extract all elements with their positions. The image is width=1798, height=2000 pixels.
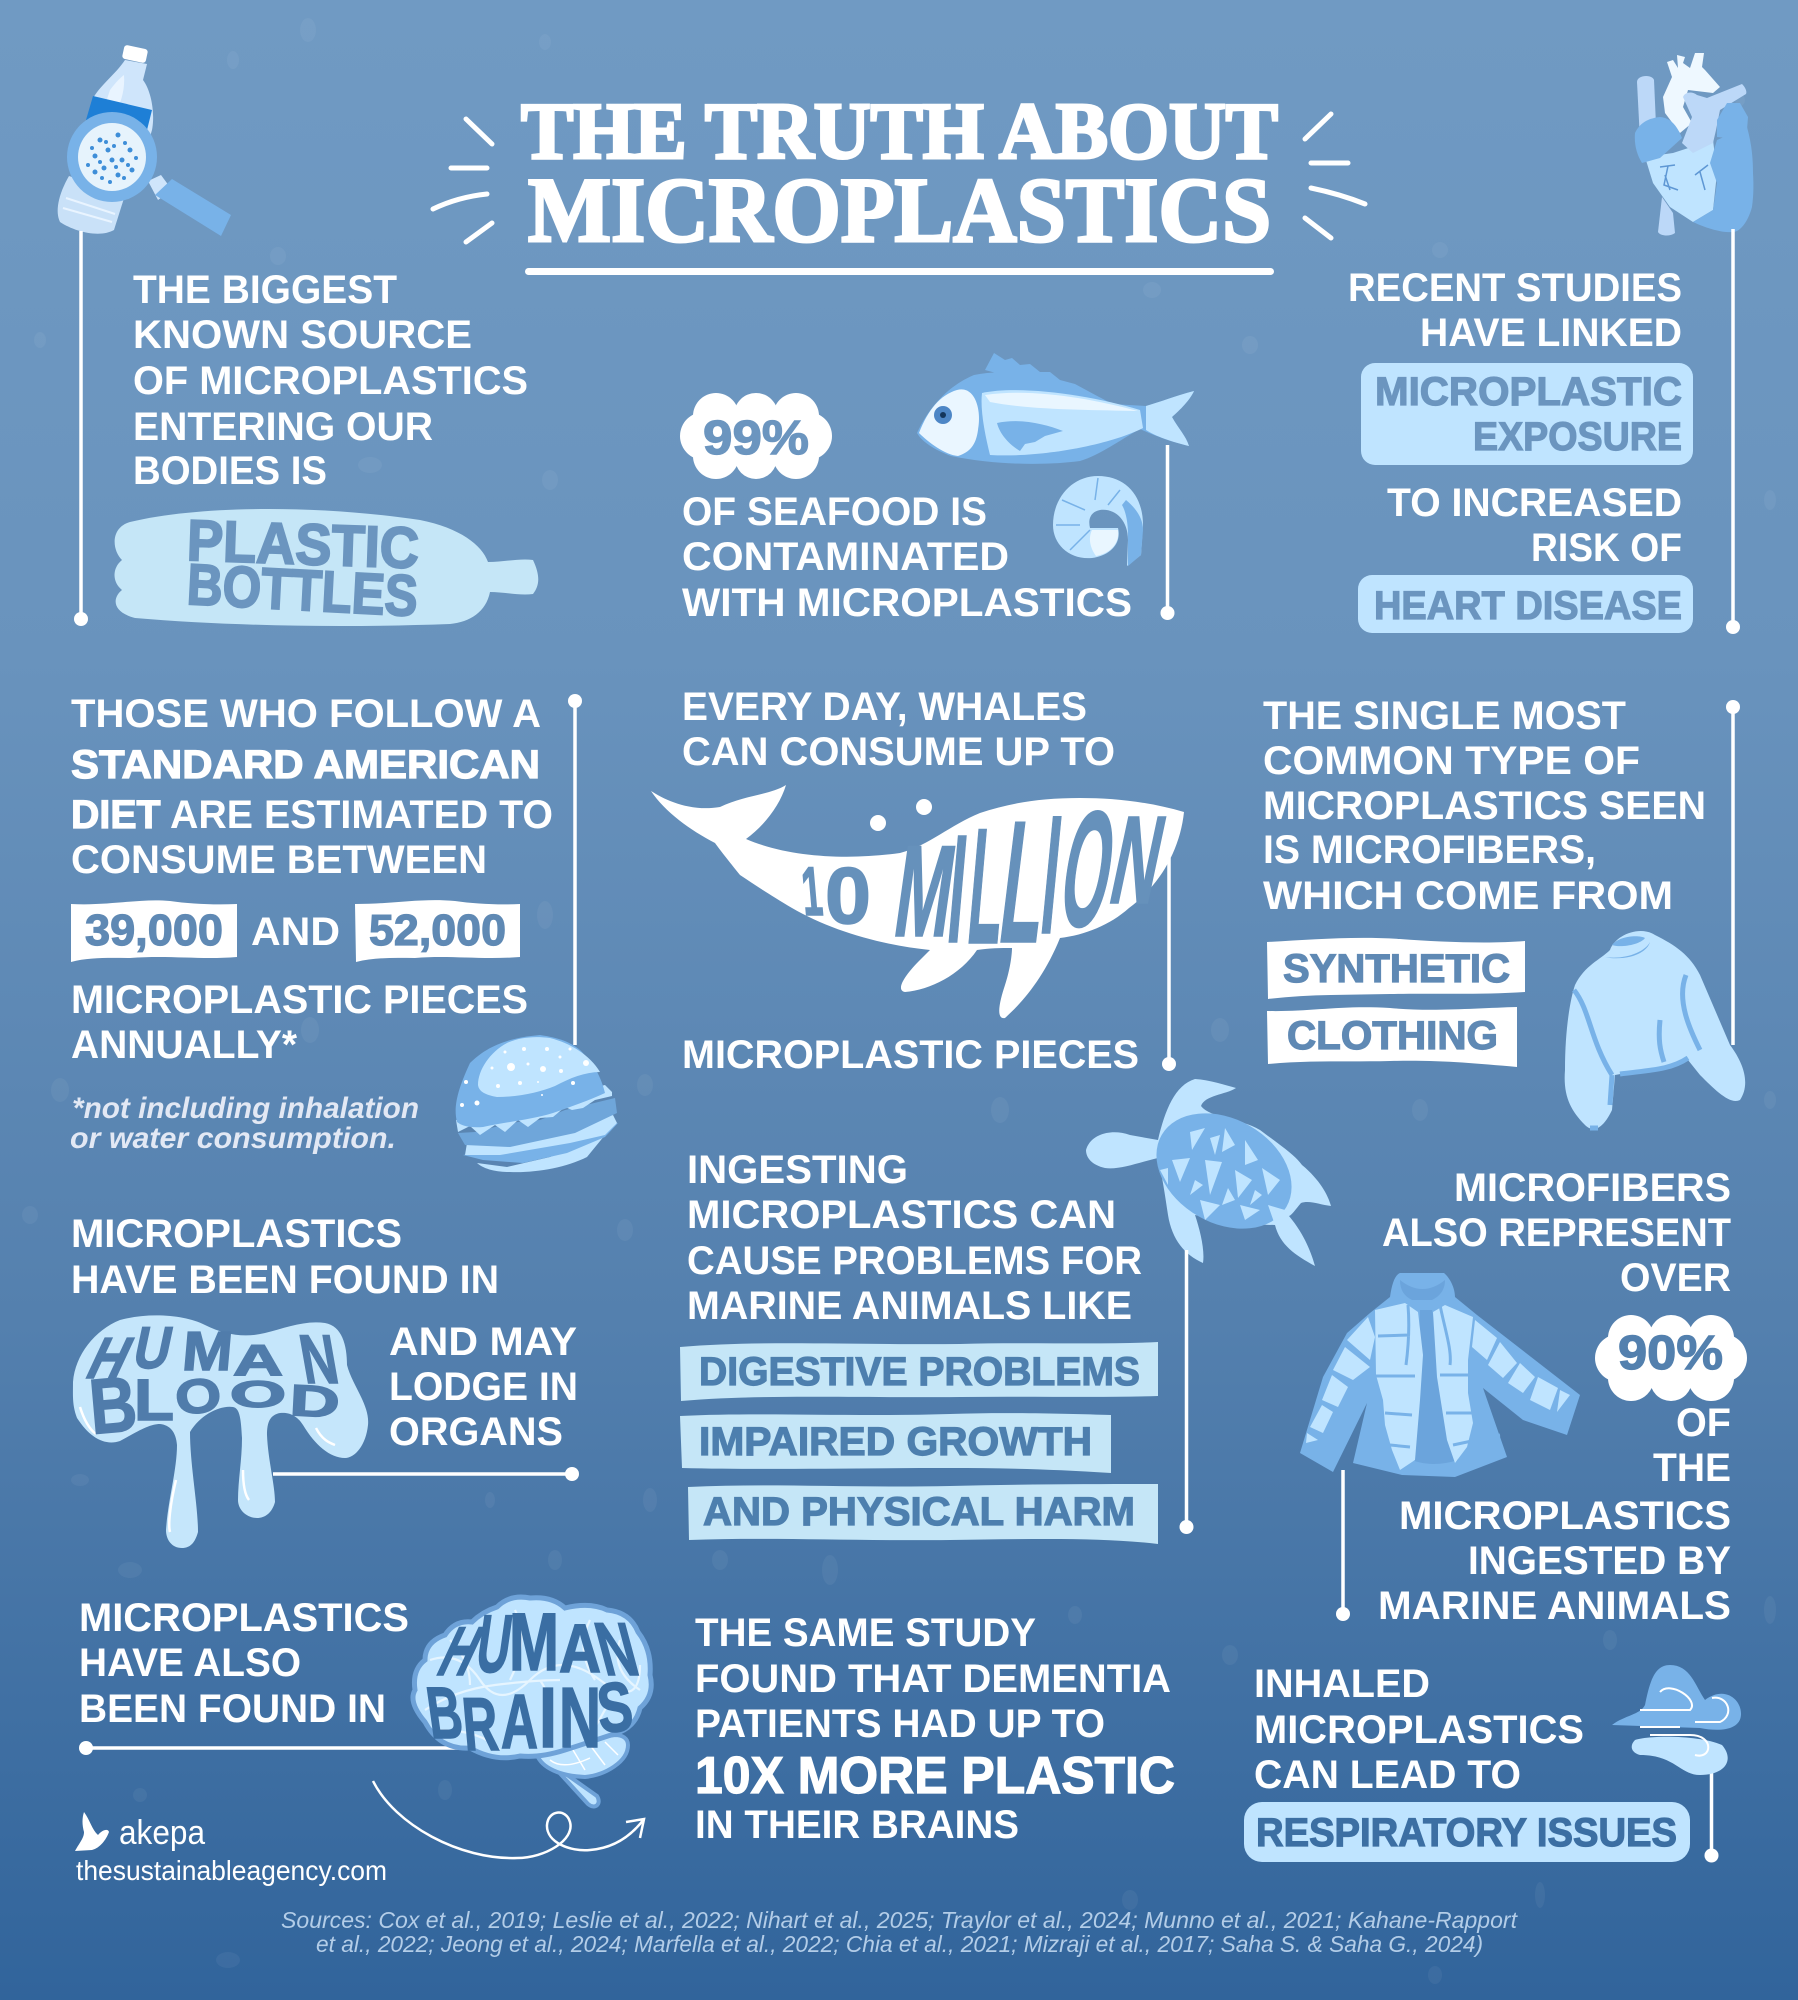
text: of the microplastics ingested: MICROPLASTICS xyxy=(1399,1494,1731,1538)
illustration: brain: N xyxy=(587,1608,646,1692)
logo: akepa: thesustainableagency.com xyxy=(76,1855,387,1886)
title text xyxy=(521,88,1278,261)
text: microfibers xyxy=(1263,694,1706,918)
illustration: whale with 10 million: O xyxy=(1050,778,1126,962)
text: biggest source: THE BIGGEST xyxy=(133,268,397,312)
label: heart disease: HEART DISEASE xyxy=(1374,584,1682,628)
text: also found in: MICROPLASTICS xyxy=(79,1596,409,1640)
title text: MICROPLASTICS xyxy=(528,159,1271,261)
text: ingesting problems: MICROPLASTICS CAN xyxy=(687,1193,1116,1237)
footnote: *not including inhalation xyxy=(72,1092,419,1125)
title underline xyxy=(525,268,1274,275)
text: also found in: HAVE ALSO xyxy=(79,1641,301,1685)
text: pieces annually: ANNUALLY* xyxy=(71,1023,297,1067)
text: recent studies: HAVE LINKED xyxy=(1420,311,1682,355)
label: synthetic clothing: CLOTHING xyxy=(1287,1014,1498,1058)
label: respiratory issues: RESPIRATORY ISSUES xyxy=(1256,1811,1677,1855)
text: and may lodge: AND MAY xyxy=(389,1320,577,1364)
logo: akepa xyxy=(75,1812,387,1886)
label: microplastic exposure xyxy=(1361,363,1693,465)
illustration: brain: I xyxy=(539,1671,557,1766)
text: found in: HAVE BEEN FOUND IN xyxy=(71,1258,499,1302)
icon: burger xyxy=(456,1035,618,1172)
illustration: brain: B xyxy=(422,1672,467,1754)
text: and may lodge: LODGE IN xyxy=(389,1365,578,1409)
text: biggest source xyxy=(133,268,528,493)
text: found in: MICROPLASTICS xyxy=(71,1212,402,1256)
text: increased risk xyxy=(1387,481,1682,570)
illustration: whale with 10 million: I xyxy=(1035,780,1069,969)
text: found in xyxy=(71,1212,499,1302)
label: 39,000 and 52,000: 39,000 xyxy=(85,906,223,955)
illustration: brain: A xyxy=(501,1679,538,1765)
text: diet estimate: DIET ARE ESTIMATED TO xyxy=(71,793,553,837)
icon: shrimp xyxy=(1053,476,1143,566)
label: impaired growth: IMPAIRED GROWTH xyxy=(699,1420,1092,1464)
text: microfibers represent: MICROFIBERS xyxy=(1454,1166,1731,1210)
text: seafood contaminated: WITH MICROPLASTICS xyxy=(682,581,1132,625)
label: 39,000 and 52,000: 52,000 xyxy=(369,906,506,955)
text: microfibers represent: ALSO REPRESENT xyxy=(1382,1211,1731,1255)
logo: akepa: akepa xyxy=(119,1814,205,1852)
text: seafood contaminated xyxy=(682,490,1132,625)
illustration: blood drip: U xyxy=(128,1315,178,1381)
illustration: brain: S xyxy=(593,1667,636,1748)
text: microfibers: MICROPLASTICS SEEN xyxy=(1263,784,1706,828)
label: and physical harm xyxy=(688,1484,1158,1544)
panel: marine animals xyxy=(680,1079,1331,1544)
panel: dementia study: 10X MORE PLASTIC xyxy=(695,1747,1175,1805)
illustration: blood drip: O xyxy=(173,1368,224,1426)
icon: wind xyxy=(1612,1665,1741,1775)
panel: plastic bottles xyxy=(58,45,538,629)
illustration: whale with 10 million xyxy=(651,778,1184,1018)
text: pieces annually: MICROPLASTIC PIECES xyxy=(71,978,528,1022)
illustration: whale with 10 million: 0 xyxy=(825,851,871,940)
text: diet estimate: CONSUME BETWEEN xyxy=(71,838,487,882)
text: of the microplastics ingested: INGESTED BY xyxy=(1468,1539,1731,1583)
panel: respiratory issues xyxy=(1244,1662,1741,1862)
illustration: whale with 10 million: M xyxy=(887,819,964,964)
text: biggest source: ENTERING OUR xyxy=(133,405,433,449)
text: recent studies xyxy=(1348,266,1682,355)
text: diet estimate: STANDARD AMERICAN xyxy=(71,743,540,787)
text: microfibers represent xyxy=(1382,1166,1731,1300)
illustration: blood drip: B xyxy=(86,1359,140,1451)
title xyxy=(433,88,1365,275)
illustration: whale with 10 million: L xyxy=(991,786,1057,980)
text: increased risk: TO INCREASED xyxy=(1387,481,1682,525)
bottle-shaped label: plastic bottles xyxy=(114,508,538,629)
text: microfibers: IS MICROFIBERS, xyxy=(1263,828,1596,872)
text: microfibers: COMMON TYPE OF xyxy=(1263,739,1640,783)
panel: seafood xyxy=(680,353,1194,625)
panel: human blood xyxy=(71,1212,579,1548)
label: and physical harm: AND PHYSICAL HARM xyxy=(703,1490,1135,1534)
sources xyxy=(281,1907,1519,1957)
text: and may lodge: ORGANS xyxy=(389,1410,563,1454)
label: 39,000 and 52,000: AND xyxy=(251,910,340,954)
text: also found in: BEEN FOUND IN xyxy=(79,1687,386,1731)
panel: dementia study: PATIENTS HAD UP TO xyxy=(695,1702,1105,1746)
callout: 99% cloud: 99% xyxy=(703,412,809,465)
text: recent studies: RECENT STUDIES xyxy=(1348,266,1682,310)
label: microplastic exposure: MICROPLASTIC xyxy=(1375,370,1682,414)
text: microfibers represent: OVER xyxy=(1620,1256,1731,1300)
bottle-shaped label: plastic bottles: BOTTLES xyxy=(185,552,420,629)
text: inhaled: CAN LEAD TO xyxy=(1254,1753,1521,1797)
label: synthetic clothing xyxy=(1267,938,1525,1067)
callout: 90% cloud xyxy=(1595,1315,1747,1401)
text: inhaled: INHALED xyxy=(1254,1662,1430,1706)
illustration: blood drip: O xyxy=(230,1374,286,1415)
text: microplastic pieces: MICROPLASTIC PIECES xyxy=(682,1033,1139,1077)
panel: microfibers xyxy=(1263,694,1747,1628)
text: ingesting problems: MARINE ANIMALS LIKE xyxy=(687,1284,1132,1328)
illustration: whale with 10 million: N xyxy=(1100,790,1176,930)
panel: dementia study: THE SAME STUDY xyxy=(695,1611,1036,1655)
text: of the microplastics ingested xyxy=(1378,1401,1731,1628)
text: ingesting problems: INGESTING xyxy=(687,1148,908,1192)
illustration: blood drip: D xyxy=(288,1376,341,1428)
text: seafood contaminated: OF SEAFOOD IS xyxy=(682,490,987,534)
arrow: squiggle to dementia text xyxy=(373,1781,644,1858)
panel: dementia study: FOUND THAT DEMENTIA xyxy=(695,1657,1171,1701)
footnote xyxy=(70,1092,419,1155)
text: inhaled xyxy=(1254,1662,1584,1797)
icon: heart xyxy=(1635,53,1753,236)
text: diet estimate xyxy=(71,692,553,882)
label: digestive problems: DIGESTIVE PROBLEMS xyxy=(699,1350,1140,1394)
text: whales intro: EVERY DAY, WHALES xyxy=(682,685,1087,729)
label: 39,000 and 52,000 xyxy=(71,900,520,962)
illustration: whale with 10 million: L xyxy=(962,794,1012,979)
icon: puffer jacket xyxy=(1300,1273,1580,1477)
text: and may lodge xyxy=(389,1320,578,1454)
text: biggest source: BODIES IS xyxy=(133,449,327,493)
illustration: blood drip: N xyxy=(294,1320,344,1398)
text: of the microplastics ingested: OF xyxy=(1676,1401,1731,1445)
illustration: whale with 10 million: 1 xyxy=(798,852,825,930)
text: biggest source: KNOWN SOURCE xyxy=(133,313,472,357)
text: microfibers: WHICH COME FROM xyxy=(1263,874,1673,918)
illustration: brain: M xyxy=(509,1597,559,1688)
text: pieces annually xyxy=(71,978,528,1067)
panel: whales xyxy=(651,685,1184,1077)
text: ingesting problems: CAUSE PROBLEMS FOR xyxy=(687,1239,1142,1283)
text: microfibers: THE SINGLE MOST xyxy=(1263,694,1626,738)
icon: bottle under magnifying glass xyxy=(58,45,231,236)
illustration: blood drip: M xyxy=(180,1320,235,1382)
label: microplastic exposure: EXPOSURE xyxy=(1473,415,1682,459)
illustration: blood drip: A xyxy=(233,1336,283,1385)
text: also found in xyxy=(79,1596,409,1731)
illustration: blood drip: L xyxy=(134,1368,174,1433)
label: impaired growth xyxy=(680,1413,1111,1473)
text: ingesting problems xyxy=(687,1148,1142,1328)
callout: 90% cloud: 90% xyxy=(1618,1327,1723,1380)
title sunburst rays xyxy=(433,114,1365,242)
text: inhaled: MICROPLASTICS xyxy=(1254,1708,1584,1752)
callout: 99% cloud xyxy=(680,393,832,479)
panel: dementia study xyxy=(695,1611,1175,1847)
text: of the microplastics ingested: MARINE ANIMALS xyxy=(1378,1584,1731,1628)
text: increased risk: RISK OF xyxy=(1531,526,1682,570)
icon: sweater xyxy=(1565,931,1745,1129)
icon: turtle with plastic xyxy=(1086,1079,1331,1266)
illustration: brain xyxy=(413,1597,651,1806)
text: whales intro xyxy=(682,685,1115,774)
label: synthetic clothing: SYNTHETIC xyxy=(1283,947,1510,991)
illustration: brain: N xyxy=(559,1671,601,1766)
panel: human brains xyxy=(79,1596,651,1858)
illustration: brain: R xyxy=(459,1682,501,1766)
bottle-shaped label: plastic bottles: PLASTIC xyxy=(186,508,420,581)
text: whales intro: CAN CONSUME UP TO xyxy=(682,730,1115,774)
icon: fish xyxy=(917,353,1194,464)
sources: Sources: Cox et al., 2019; Leslie et al., 2022; Nihart et al., 2025; Traylor et al., 2024; Munno et al., 2021; Kahane-Rapport xyxy=(281,1907,1519,1933)
title text: THE TRUTH ABOUT xyxy=(521,88,1278,176)
text: of the microplastics ingested: THE xyxy=(1653,1446,1731,1490)
panel: dementia study: IN THEIR BRAINS xyxy=(695,1803,1019,1847)
sources: et al., 2022; Jeong et al., 2024; Marfella et al., 2022; Chia et al., 2021; Mizraji et al., 2017; Saha S. & Saha G., 2024) xyxy=(316,1931,1483,1957)
footnote: or water consumption. xyxy=(70,1122,396,1155)
illustration: brain: H xyxy=(427,1613,495,1690)
text: diet estimate: THOSE WHO FOLLOW A xyxy=(71,692,541,736)
panel: heart disease xyxy=(1348,53,1753,634)
illustration: blood drip: H xyxy=(77,1326,143,1390)
illustration: whale with 10 million: I xyxy=(942,802,973,975)
text: biggest source: OF MICROPLASTICS xyxy=(133,359,528,403)
text: seafood contaminated: CONTAMINATED xyxy=(682,535,1009,579)
panel: standard american diet xyxy=(70,692,618,1172)
illustration: brain: U xyxy=(471,1598,517,1690)
illustration: brain: A xyxy=(559,1610,601,1687)
illustration: blood drip xyxy=(73,1315,368,1548)
